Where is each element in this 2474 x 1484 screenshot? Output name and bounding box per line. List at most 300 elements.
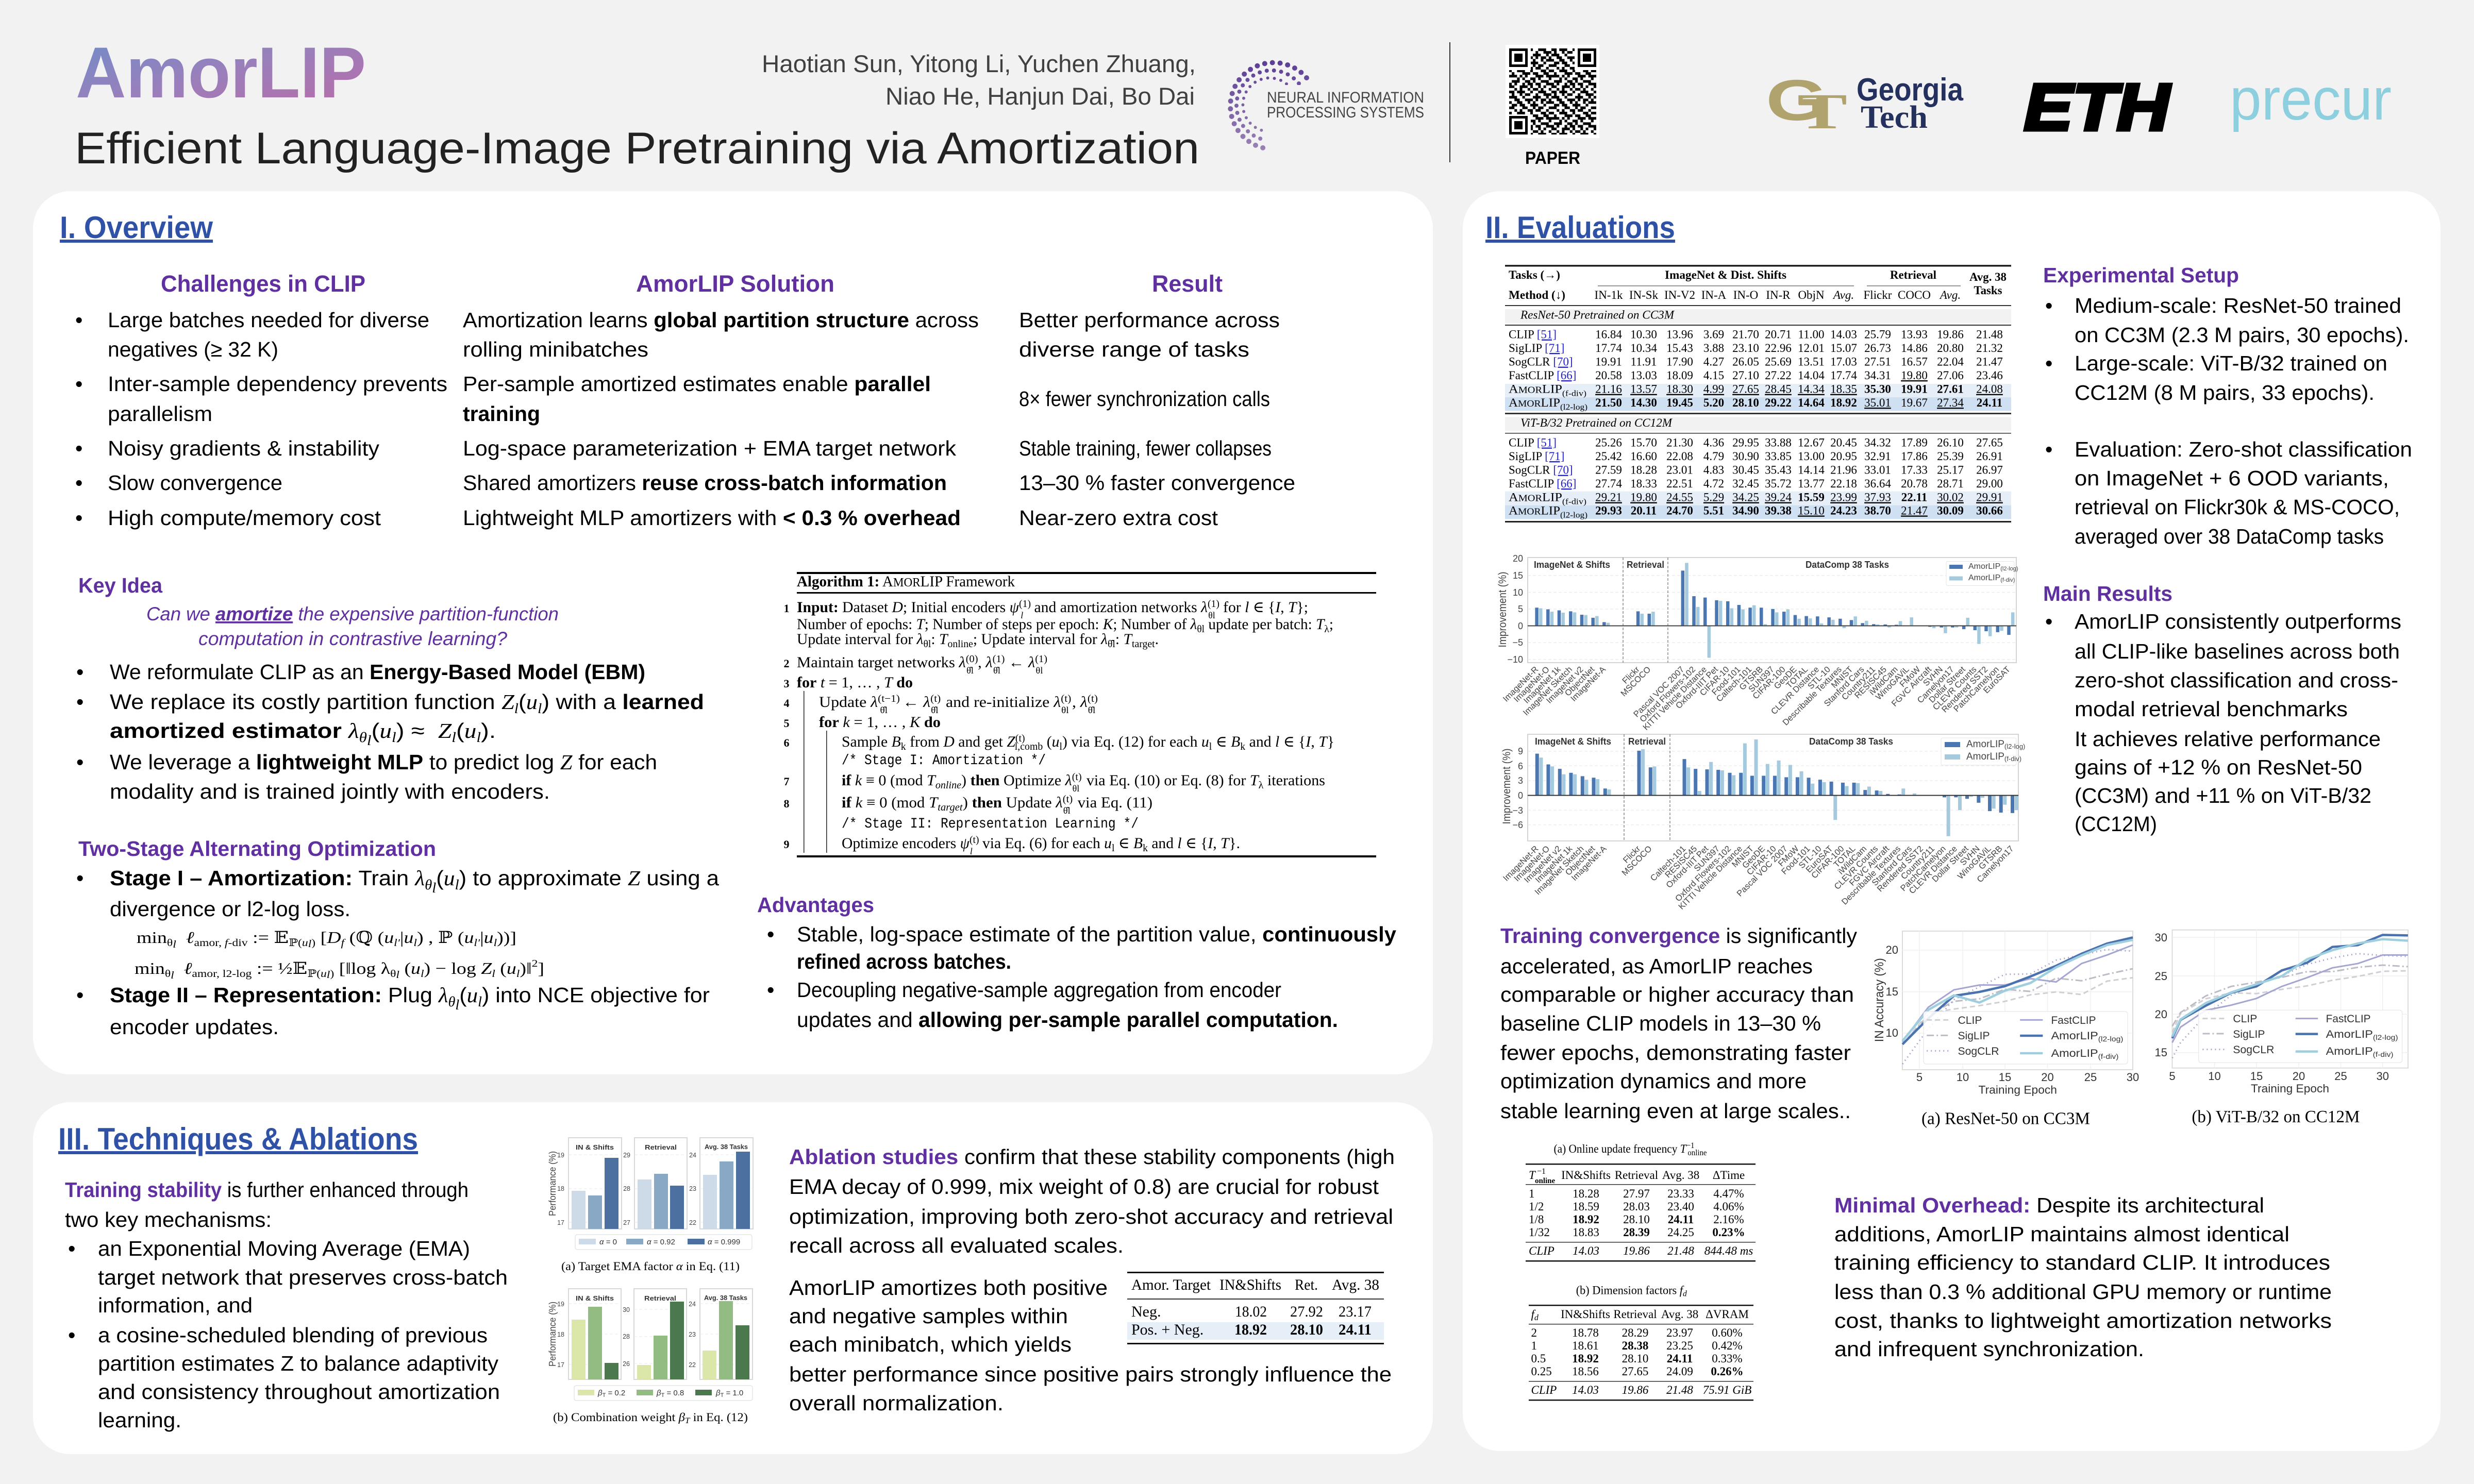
text: amortizes positive and negative: overall normalization. <box>789 1391 1004 1415</box>
block: advantages <box>757 893 1396 1032</box>
bar chart: improvement on ResNet-50: AmorLIP <box>1968 562 2000 571</box>
algorithm box: Update λ <box>819 694 877 711</box>
table: main results: 16.57 <box>1901 356 1928 368</box>
line chart: ResNet-50 on CC3M: 10 <box>1957 1071 1969 1084</box>
algorithm box: iterations <box>1263 772 1325 789</box>
table: main results: 21.47 <box>1901 504 1928 517</box>
algorithm box: via Eq. (11) <box>1074 794 1152 811</box>
bar chart: improvement on ViT-B/32: Pascal VOC 2007 <box>1735 844 1790 899</box>
bar chart: improvement on ViT-B/32: TOTAL <box>1832 844 1857 869</box>
bar chart: improvement on ResNet-50: GTSRB <box>1737 665 1765 692</box>
table: amortization target: Avg. 38 <box>1332 1276 1379 1293</box>
algorithm box: /* Stage I: Amortization */ <box>842 753 1046 769</box>
table: main results: 18.28 <box>1630 464 1657 477</box>
table: main results: 33.01 <box>1864 464 1891 477</box>
table: dimension factors: (b) Dimension factors f <box>1576 1284 1683 1297</box>
text: experimental setup: averaged over 38 DataComp tasks <box>2075 525 2384 548</box>
algorithm box: Update interval for λ <box>797 631 924 648</box>
table: main results: 14.04 <box>1798 369 1825 382</box>
bar chart: improvement on ViT-B/32: GTSRB <box>1977 844 2004 871</box>
table: main results: 19.80 <box>1901 369 1928 382</box>
table: dimension factors: 18.92 <box>1572 1352 1599 1365</box>
table: main results: 18.09 <box>1666 369 1693 382</box>
chart group: combination weight beta: = 1.0 <box>724 1389 743 1397</box>
line chart: ViT-B/32 on CC12M: 20 <box>2155 1008 2167 1021</box>
line chart: ResNet-50 on CC3M: 20 <box>2041 1071 2054 1084</box>
table: main results: 27.74 <box>1595 477 1622 490</box>
bar chart: improvement on ResNet-50: SUN397 <box>1747 665 1776 694</box>
table: main results: ViT-B/32 Pretrained on CC12M <box>1520 416 1673 429</box>
table: main results: SogCLR [70] <box>1509 464 1573 477</box>
bar chart: improvement on ResNet-50: ImageNet-R <box>1501 665 1540 704</box>
algorithm box: ( <box>1043 733 1052 750</box>
bar chart: improvement on ViT-B/32: Caltech-101 <box>1649 844 1687 883</box>
algorithm box: online <box>935 780 961 791</box>
bar chart: improvement on ResNet-50: 0 <box>1518 621 1523 631</box>
equation: l2-log amortization loss: l <box>171 970 174 981</box>
equation: l2-log amortization loss: amor, l2-log <box>192 968 252 980</box>
text: minimal overhead: additions, AmorLIP maintains almost identical <box>1834 1222 2289 1246</box>
algorithm box: then Update λ <box>972 794 1062 811</box>
table: main results: 4.83 <box>1703 464 1724 477</box>
bar chart: improvement on ResNet-50: ObjectNet <box>1563 665 1597 698</box>
table: main results: 13.77 <box>1798 477 1825 490</box>
bar chart: improvement on ResNet-50: Oxford-IIIT Pet <box>1674 665 1720 711</box>
text: amortizes positive and negative: better performance since positive pairs strongly influence the <box>789 1362 1392 1386</box>
line chart: ViT-B/32 on CC12M: AmorLIP <box>2326 1045 2368 1057</box>
bar chart: improvement on ResNet-50: Camelyon17 <box>1916 665 1956 705</box>
chart group: combination weight beta: 23 <box>689 1331 696 1338</box>
table: online update frequency: Retrieval <box>1615 1169 1658 1182</box>
bar chart: improvement on ViT-B/32: 9 <box>1518 746 1523 756</box>
column: challenges in CLIP: Challenges in CLIP <box>161 271 365 297</box>
table: main results: Avg. 38 <box>1969 271 2007 283</box>
table: main results: Tasks <box>1974 284 2002 297</box>
table: online update frequency: 28.10 <box>1623 1213 1650 1226</box>
table: main results: 34.25 <box>1732 491 1759 504</box>
bar chart: improvement on ResNet-50: −10 <box>1507 654 1523 665</box>
table: main results: Avg. <box>1832 289 1854 301</box>
algorithm box: u <box>1104 835 1112 852</box>
block: key idea: ) ≈ <box>396 719 438 743</box>
table: dimension factors: f <box>1531 1308 1534 1321</box>
bar chart: improvement on ResNet-50 <box>1497 553 2018 732</box>
table: online update frequency: 4.06% <box>1713 1200 1744 1213</box>
table: online update frequency: 1/32 <box>1529 1226 1550 1239</box>
block: key idea: with a learned <box>556 690 697 714</box>
logo: precur: precur <box>2230 66 2392 132</box>
text: amortizes positive and negative: AmorLIP amortizes both positive <box>789 1276 1108 1300</box>
table: main results: Retrieval <box>1890 268 1936 281</box>
table: main results: IN-R <box>1766 289 1791 301</box>
table: main results: 5.51 <box>1703 504 1724 517</box>
algorithm box: λ <box>1080 694 1088 711</box>
table: online update frequency: 24.11 <box>1668 1213 1694 1226</box>
equation: l2-log amortization loss: l <box>492 968 495 980</box>
bar chart: improvement on ResNet-50: MSCOCO <box>1619 665 1653 698</box>
table: online update frequency: 4.47% <box>1713 1187 1744 1200</box>
table: main results: 5.29 <box>1703 491 1724 504</box>
authors: Niao He, Hanjun Dai, Bo Dai <box>885 82 1195 110</box>
table: main results: 34.32 <box>1864 436 1891 449</box>
table: online update frequency: 28.03 <box>1623 1200 1650 1213</box>
table: amortization target: Amor. Target <box>1131 1276 1211 1293</box>
equation: f-div amortization loss: l <box>494 937 497 949</box>
bar chart: improvement on ResNet-50: RESISC45 <box>1853 665 1888 700</box>
table: main results: IN-Sk <box>1629 289 1659 301</box>
table: online update frequency: ΔTime <box>1713 1169 1745 1182</box>
table: online update frequency: T <box>1529 1169 1536 1182</box>
bar chart: improvement on ResNet-50: ImageNet Sketch <box>1522 665 1574 717</box>
table: main results: 19.91 <box>1595 356 1622 368</box>
table: main results: 15.43 <box>1666 342 1693 355</box>
table: main results: 17.89 <box>1901 436 1928 449</box>
table: dimension factors: 18.61 <box>1572 1339 1599 1352</box>
algorithm box: θl <box>923 638 931 650</box>
bar chart: improvement on ResNet-50: SVHN <box>1921 665 1945 688</box>
chart group: combination weight beta: Retrieval <box>644 1295 676 1302</box>
line chart: ResNet-50 on CC3M: SogCLR <box>1958 1045 1999 1057</box>
text: ablation studies: recall across all evaluated scales. <box>789 1234 1124 1257</box>
table: online update frequency: (a) Online update frequency T <box>1553 1142 1687 1155</box>
column: result: Better performance across <box>1019 308 1280 332</box>
table: main results: (l2-log) <box>1560 511 1587 519</box>
table: main results: 15.10 <box>1798 504 1825 517</box>
equation: l2-log amortization loss: l <box>327 969 330 981</box>
table: amortization target: 18.02 <box>1235 1303 1267 1320</box>
chart group: combination weight beta: T <box>661 1392 665 1398</box>
table: main results: 35.43 <box>1765 464 1792 477</box>
table: main results: 27.06 <box>1937 369 1964 382</box>
equation: l2-log amortization loss: min <box>135 959 160 977</box>
equation: f-div amortization loss: (ℚ ( <box>344 928 384 947</box>
column: AmorLIP solution <box>463 271 979 530</box>
bar chart: improvement on ResNet-50: Country211 <box>1840 665 1877 702</box>
table: main results: 13.51 <box>1798 356 1825 368</box>
block: two-stage alternating optimization: u <box>444 866 455 890</box>
bar chart: improvement on ViT-B/32: AmorLIP <box>1966 739 2004 750</box>
bar chart: improvement on ViT-B/32: RESISC45 <box>1663 844 1699 880</box>
bar chart: improvement on ResNet-50: KITTI Vehicle Distance <box>1641 665 1709 732</box>
caption (b): (b) Combination weight β <box>553 1411 684 1424</box>
table: main results: Method (↓) <box>1509 289 1565 301</box>
equation: l2-log amortization loss: ℙ( <box>307 968 321 980</box>
algorithm box: θ̂l <box>1063 805 1071 816</box>
table: main results: IN-A <box>1701 289 1727 301</box>
table: main results: 27.65 <box>1976 436 2003 449</box>
table: dimension factors: 18.78 <box>1572 1326 1599 1339</box>
table: main results: 23.46 <box>1976 369 2003 382</box>
block: advantages: • <box>767 922 774 946</box>
table: main results: 26.73 <box>1864 342 1891 355</box>
line chart: ViT-B/32 on CC12M: 15 <box>2155 1046 2167 1059</box>
table: main results: 30.09 <box>1937 504 1964 517</box>
table: main results: 26.10 <box>1937 436 1964 449</box>
algorithm box: if k ≡ 0 (mod T <box>842 772 935 789</box>
line chart: ResNet-50 on CC3M: 20 <box>1886 943 1898 956</box>
chart group: combination weight beta: β <box>656 1389 661 1397</box>
algorithm box: θl <box>1073 783 1079 794</box>
table: main results: CLIP [51] <box>1509 328 1557 341</box>
algorithm box: λ <box>1200 599 1208 616</box>
table: dimension factors: IN&Shifts <box>1561 1308 1610 1321</box>
table: main results: 14.14 <box>1798 464 1825 477</box>
bar chart: improvement on ViT-B/32: CLEVR Distance <box>1908 844 1959 896</box>
table: online update frequency: 2.16% <box>1713 1213 1744 1226</box>
table: dimension factors: 0.25 <box>1531 1365 1552 1378</box>
table: main results: 36.64 <box>1864 477 1891 490</box>
algorithm box: u <box>1201 733 1209 750</box>
algorithm box: λ <box>1324 623 1329 635</box>
table: main results: 25.17 <box>1937 464 1964 477</box>
table: main results: 21.96 <box>1830 464 1857 477</box>
bar chart: improvement on ResNet-50: GeoDE <box>1773 665 1799 691</box>
line chart: ResNet-50 on CC3M: Training Epoch <box>1978 1084 2057 1097</box>
text: main results: modal retrieval benchmarks <box>2075 697 2348 721</box>
table: main results: CLIP [51] <box>1509 436 1557 449</box>
equation: l2-log amortization loss: u <box>321 968 327 980</box>
algorithm box: θ̂l <box>880 705 888 715</box>
algorithm box: ← <box>898 694 923 711</box>
table: main results: 19.91 <box>1901 383 1928 396</box>
table: main results: 21.70 <box>1732 328 1759 341</box>
column: challenges in CLIP: • <box>75 436 82 460</box>
chart group: combination weight beta: 19 <box>557 1301 564 1308</box>
table: main results: Tasks (→) <box>1509 268 1560 281</box>
line chart: ViT-B/32 on CC12M: 25 <box>2334 1070 2347 1083</box>
table: dimension factors: d <box>1534 1313 1539 1322</box>
bar chart: improvement on ResNet-50: 15 <box>1513 570 1523 581</box>
table: main results: 13.00 <box>1798 450 1825 463</box>
column: AmorLIP solution: Amortization learns global partition structure across <box>463 308 979 332</box>
equation: l2-log amortization loss: θ <box>165 968 171 980</box>
equation: f-div amortization loss: u <box>404 928 413 947</box>
bar chart: improvement on ResNet-50: Dollar Street <box>1927 665 1967 705</box>
bar chart: improvement on ViT-B/32: −6 <box>1512 820 1523 830</box>
block: key idea: ( <box>519 690 526 714</box>
line chart: ResNet-50 on CC3M: 10 <box>1886 1026 1898 1039</box>
table: main results: 25.39 <box>1937 450 1964 463</box>
algorithm box: θ̂l <box>1088 705 1095 715</box>
table: main results: 27.65 <box>1732 383 1759 396</box>
block: advantages: • <box>767 978 774 1002</box>
table: dimension factors: Retrieval <box>1613 1308 1657 1321</box>
table: main results: 20.71 <box>1765 328 1792 341</box>
table: online update frequency: 844.48 ms <box>1704 1244 1753 1257</box>
text: main results: all CLIP-like baselines across both <box>2075 639 2400 663</box>
table: dimension factors <box>1529 1284 1753 1401</box>
table: main results: 30.90 <box>1732 450 1759 463</box>
bar chart: improvement on ResNet-50: PatchCamelyon <box>1952 665 2001 714</box>
text: experimental setup: Experimental Setup <box>2043 263 2239 287</box>
algorithm box: ) via Eq. (12) for each <box>1062 733 1201 750</box>
algorithm box: T <box>1250 772 1260 789</box>
bar chart: improvement on ResNet-50: Retrieval <box>1627 560 1664 570</box>
algorithm box: (0) <box>966 653 978 665</box>
bar chart: improvement on ViT-B/32: Camelyon17 <box>1975 844 2016 884</box>
table: amortization target: 23.17 <box>1339 1303 1372 1320</box>
equation: f-div amortization loss: u <box>384 928 394 947</box>
caption (b): T <box>685 1416 691 1425</box>
bar chart: improvement on ResNet-50: AmorLIP <box>1968 574 2000 582</box>
logo: Georgia Tech <box>1766 68 1963 140</box>
column: challenges in CLIP: negatives (≥ 32 K) <box>108 338 278 361</box>
algorithm box: for k = 1, … , K do <box>819 714 941 731</box>
table: main results: 26.97 <box>1976 464 2003 477</box>
line chart: ResNet-50 on CC3M: AmorLIP <box>2051 1030 2093 1042</box>
text: minimal overhead: and infrequent synchronization. <box>1834 1337 2144 1361</box>
table: main results: 13.93 <box>1901 328 1928 341</box>
algorithm box: 3 <box>783 677 790 690</box>
algorithm box: l <box>1021 610 1023 620</box>
table: dimension factors: 14.03 <box>1572 1384 1599 1396</box>
line chart: ResNet-50 on CC3M: FastCLIP <box>2051 1015 2096 1026</box>
bar chart: improvement on ViT-B/32: 0 <box>1518 790 1523 801</box>
table: main results: AMORLIP <box>1509 491 1560 504</box>
table: main results: IN-O <box>1733 289 1758 301</box>
block: two-stage alternating optimization: Two-Stage Alternating Optimization <box>78 837 436 861</box>
algorithm box: ; <box>1329 616 1333 633</box>
algorithm box: θ̂l <box>1108 638 1115 650</box>
block: two-stage alternating optimization: l <box>432 880 436 896</box>
algorithm box: (1) <box>1019 598 1031 610</box>
equation: f-div amortization loss: ) <box>311 937 315 949</box>
algorithm box: update per batch: <box>1205 616 1316 633</box>
table: main results: 17.74 <box>1830 369 1857 382</box>
text: experimental setup: Large-scale: ViT-B/32 trained on <box>2075 351 2387 375</box>
block: two-stage alternating optimization: ) <box>459 866 466 890</box>
chart group: combination weight beta: β <box>715 1389 721 1397</box>
table: main results: 14.34 <box>1798 383 1825 396</box>
table: online update frequency: 18.59 <box>1573 1200 1599 1213</box>
bar chart: improvement on ViT-B/32: Oxford Flowers-102 <box>1674 844 1733 903</box>
chart group: target EMA factor alpha: IN & Shifts <box>576 1144 614 1151</box>
table: main results: 15.59 <box>1798 491 1825 504</box>
table: dimension factors: 28.38 <box>1622 1339 1648 1352</box>
block: key idea: u <box>526 690 538 714</box>
heading: II. Evaluations: II. Evaluations <box>1485 210 1675 245</box>
table: main results: 29.00 <box>1976 477 2003 490</box>
algorithm box: λ <box>923 694 930 711</box>
authors <box>762 50 1196 110</box>
bar chart: improvement on ResNet-50: Describable Textures <box>1781 665 1844 728</box>
algorithm box: (t−1) <box>878 693 900 704</box>
chart group: combination weight beta: 28 <box>623 1333 630 1340</box>
bar chart: improvement on ResNet-50: −5 <box>1512 637 1523 648</box>
block: key idea: • <box>76 660 83 684</box>
line chart: ResNet-50 on CC3M: 30 <box>2127 1071 2139 1084</box>
bar chart: improvement on ViT-B/32: iWildCam <box>1836 844 1868 876</box>
bar chart: improvement on ResNet-50: (f-div) <box>2000 577 2015 583</box>
table: dimension factors: 27.65 <box>1622 1365 1648 1378</box>
bar chart: improvement on ResNet-50: (l2-log) <box>2000 566 2018 572</box>
algorithm box: B <box>1133 835 1143 852</box>
algorithm box: 2 <box>783 657 790 670</box>
table: online update frequency: 18.83 <box>1573 1226 1599 1239</box>
text: experimental setup: on CC3M (2.3 M pairs, 30 epochs). <box>2075 323 2409 347</box>
chart group: target EMA factor alpha: 27 <box>623 1219 630 1226</box>
table: main results: 17.74 <box>1595 342 1622 355</box>
logo: Georgia Tech: G <box>1766 68 1828 132</box>
chart group: target EMA factor alpha: 28 <box>623 1185 630 1192</box>
chart group: target EMA factor alpha: 22 <box>689 1219 696 1226</box>
bar chart: improvement on ResNet-50: 10 <box>1513 587 1523 598</box>
block: advantages: Advantages <box>757 893 874 917</box>
bar chart: improvement on ViT-B/32: SVHN <box>1959 844 1982 867</box>
table: dimension factors: 0.33% <box>1712 1352 1743 1365</box>
bar chart: improvement on ViT-B/32: Retrieval <box>1628 736 1666 747</box>
table: amortization target: 28.10 <box>1290 1321 1323 1338</box>
table: online update frequency: IN&Shifts <box>1561 1169 1611 1182</box>
line chart: ViT-B/32 on CC12M: SogCLR <box>2233 1044 2274 1056</box>
equation: f-div amortization loss: | <box>480 928 484 947</box>
block: key idea: computation in contrastive learning? <box>198 628 507 649</box>
table: main results: FastCLIP [66] <box>1509 369 1576 382</box>
text: minimal overhead: less than 0.3 % additional GPU memory or runtime <box>1834 1280 2332 1304</box>
table: main results: 35.30 <box>1864 383 1891 396</box>
chart group: combination weight beta: = 0.8 <box>664 1389 684 1397</box>
block: two-stage alternating optimization: encoder updates. <box>110 1015 279 1039</box>
table: amortization target: 27.92 <box>1290 1303 1323 1320</box>
QR caption: PAPER <box>1525 148 1580 168</box>
algorithm box: θ̂l <box>931 705 939 715</box>
bar chart: improvement on ResNet-50: CLEVR Distance <box>1769 665 1821 716</box>
table: main results <box>1505 265 2011 522</box>
block: key idea: Key Idea <box>78 574 163 597</box>
table: main results: Avg. <box>1939 289 1961 301</box>
bar chart: improvement on ViT-B/32: GeoDE <box>1741 844 1767 870</box>
equation: l2-log amortization loss: ) − log <box>424 959 481 977</box>
block: key idea: Z <box>438 719 453 743</box>
line chart: ViT-B/32 on CC12M: 15 <box>2250 1070 2263 1083</box>
table: main results: 33.88 <box>1765 436 1792 449</box>
bar chart: improvement on ResNet-50: Flickr <box>1620 665 1642 686</box>
algorithm box: via Eq. (10) or Eq. (8) for <box>1082 772 1250 789</box>
authors: Haotian Sun, Yitong Li, Yuchen Zhuang, <box>762 50 1196 77</box>
text: training stability: Training stability is further enhanced through <box>65 1178 469 1202</box>
text: experimental setup: Medium-scale: ResNet-50 trained <box>2075 294 2401 317</box>
table: dimension factors: 1 <box>1531 1339 1537 1352</box>
text: experimental setup: retrieval on Flickr30k & MS-COCO, <box>2075 495 2400 519</box>
table: main results: 30.66 <box>1976 504 2003 517</box>
table: main results: 4.72 <box>1703 477 1724 490</box>
algorithm box: then Optimize λ <box>971 772 1072 789</box>
algorithm box: ; Update interval for <box>973 631 1101 648</box>
algorithm box: and re-initialize <box>942 694 1054 711</box>
table: main results: 12.67 <box>1798 436 1825 449</box>
table: main results: FastCLIP [66] <box>1509 477 1576 490</box>
bar chart: improvement on ViT-B/32: AmorLIP <box>1966 751 2004 762</box>
text: main results <box>2043 582 2401 836</box>
table: main results: 17.03 <box>1830 356 1857 368</box>
line chart: ViT-B/32 on CC12M: 30 <box>2155 931 2167 944</box>
block: key idea: l <box>367 733 372 748</box>
bar chart: improvement on ResNet-50: CIFAR-100 <box>1751 665 1787 701</box>
text: main results: • <box>2045 610 2052 633</box>
table: dimension factors: Avg. 38 <box>1661 1308 1698 1321</box>
algorithm box: from <box>906 733 943 750</box>
chart group: combination weight beta: 17 <box>557 1361 564 1369</box>
chart group: target EMA factor alpha: α = 0.92 <box>647 1238 675 1246</box>
table: main results: 21.50 <box>1595 396 1622 409</box>
chart group: combination weight beta: 18 <box>557 1331 564 1338</box>
text: main results: (CC12M) <box>2075 812 2157 836</box>
block: advantages: refined across batches. <box>797 950 1011 973</box>
caption (b) ViT-B/32 on CC12M: (b) ViT-B/32 on CC12M <box>2192 1107 2360 1126</box>
chart group: target EMA factor alpha: 24 <box>689 1152 696 1159</box>
logo: NeurIPS: NEURAL INFORMATION <box>1267 89 1424 106</box>
bar chart: improvement on ViT-B/32: (l2-log) <box>2004 743 2025 750</box>
